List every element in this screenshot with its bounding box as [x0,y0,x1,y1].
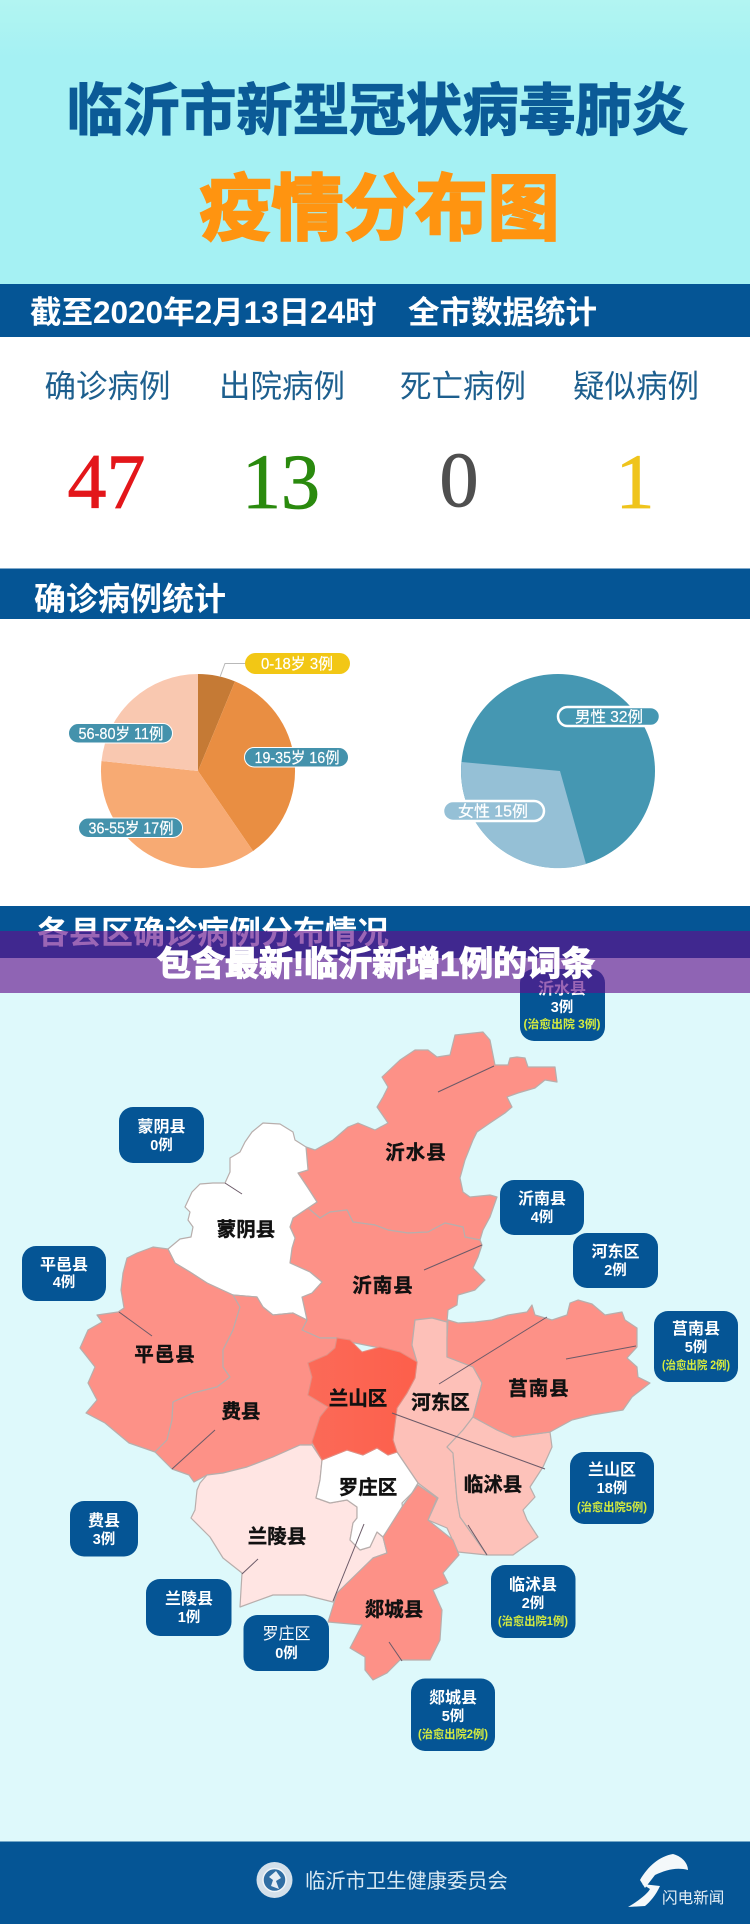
pie chart: age distribution [68,653,350,868]
callout: 蒙阴县: 蒙阴县 [137,1117,186,1136]
stat: discharged [219,368,345,525]
section band: city-wide data: 截至2020年2月13日24时 [30,294,377,330]
map labels: 莒南县 [508,1378,570,1400]
callout: 沂南县: 沂南县 [518,1190,566,1208]
section band: city-wide data: 全市数据统计 [408,294,597,330]
stat: deaths: 0 [440,436,478,523]
callout: 河东区 [573,1233,658,1288]
callout: 莒南县 [654,1311,738,1382]
map labels [134,1142,570,1621]
footer: commission name: 临沂市卫生健康委员会 [305,1870,508,1893]
callout: 兰山区: 18例 [597,1480,627,1497]
map of Linyi [80,1032,650,1680]
label: 56-80: 56-80岁 11例 [78,725,164,743]
map labels: 沂水县 [385,1142,447,1164]
pie chart: gender distribution [443,674,660,868]
map labels: 河东区 [411,1391,470,1414]
footer band [0,1842,750,1924]
section band: confirmed case statistics [0,568,750,619]
callout: 费县 [70,1501,138,1556]
stat: deaths [400,368,526,523]
panel: statistics [44,368,699,525]
region: 平邑县 [80,1247,240,1452]
region: 蒙阴县 [168,1123,322,1320]
callout: 河东区: 河东区 [591,1242,640,1261]
callout: 莒南县: 莒南县 [672,1320,720,1338]
section band: confirmed case statistics: 确诊病例统计 [34,581,226,617]
map labels: 郯城县 [365,1599,423,1621]
stat: suspected: 1 [616,438,654,525]
stat: discharged: 13 [242,438,320,525]
callout: 罗庄区: 罗庄区 [262,1625,311,1643]
region: 罗庄区 [316,1448,418,1550]
map labels: 平邑县 [134,1344,196,1366]
callout: 临沭县 [491,1565,576,1638]
stat: discharged: 出院病例 [219,368,345,404]
callout: 罗庄区: 0例 [275,1645,298,1662]
region: 莒南县 [447,1300,650,1437]
map labels: 罗庄区 [339,1476,397,1499]
stat: deaths: 死亡病例 [400,368,526,404]
callout: 费县: 3例 [93,1531,115,1548]
callout: 蒙阴县 [119,1107,204,1163]
callout: 郯城县 [411,1678,495,1751]
label: male: 男性 32例 [575,708,643,726]
map labels: 蒙阴县 [217,1219,275,1241]
label: male [558,707,660,726]
region: 临沭县 [447,1417,552,1555]
callout: 临沭县: 临沭县 [509,1575,557,1594]
label: 19-35: 19-35岁 16例 [254,749,340,767]
label: 36-55: 36-55岁 17例 [88,820,174,838]
icon: lightning news logo [628,1854,688,1907]
callout: 沂水县: 3例 [551,999,573,1016]
callout: 临沭县: (治愈出院1例) [498,1614,568,1628]
callout: 沂南县 [500,1180,584,1235]
region: 沂南县 [290,1208,485,1365]
region: 兰陵县 [191,1445,387,1607]
map labels: 费县 [221,1401,261,1423]
title line 1: 临沂市新型冠状病毒肺炎 [67,79,688,142]
region: 郯城县 [328,1485,459,1680]
callout: 兰陵县 [146,1579,232,1636]
callout: 沂水县: (治愈出院 3例) [524,1017,601,1031]
callout: 郯城县: (治愈出院2例) [418,1727,488,1741]
icon: health commission emblem [256,1862,292,1898]
callout: 兰陵县: 兰陵县 [165,1590,213,1608]
callout: 沂南县: 4例 [531,1209,553,1226]
callout: 临沭县: 2例 [522,1595,544,1612]
stat: confirmed: 确诊病例 [44,368,171,404]
region: 兰山区 [308,1338,417,1460]
label: female [443,801,544,821]
label: 0-18: 0-18岁 3例 [261,655,333,673]
callout: 罗庄区 [244,1615,329,1671]
stat: confirmed [44,368,171,525]
region: 沂水县 [298,1032,557,1240]
region: 河东区 [393,1318,487,1555]
section band: county distribution: 各县区确诊病例分布情况 [37,914,389,950]
section band: county distribution [0,906,750,958]
stat: confirmed: 47 [68,438,146,525]
callout: 河东区: 2例 [604,1262,627,1279]
title line 2: 疫情分布图 [199,170,560,250]
callout: 平邑县: 4例 [53,1274,75,1291]
label: female: 女性 15例 [458,802,528,820]
map labels: 兰山区 [329,1388,387,1410]
stat: suspected [573,368,699,525]
map labels: 兰陵县 [248,1526,306,1548]
overlay banner: 包含最新!临沂新增1例的词条 [157,946,595,984]
callout: 兰山区: 兰山区 [588,1461,636,1479]
callout: 沂水县 [520,969,605,1041]
callout: 蒙阴县: 0例 [150,1137,173,1154]
callout: 莒南县: 5例 [685,1339,707,1356]
callout: 莒南县: (治愈出院 2例) [662,1358,730,1372]
callout: 郯城县: 5例 [442,1708,464,1725]
region: 费县 [155,1295,337,1482]
callout: 郯城县: 郯城县 [429,1688,477,1707]
callout: 兰山区 [570,1452,654,1524]
callout: 费县: 费县 [88,1512,120,1530]
leader lines [119,1066,636,1661]
map labels: 沂南县 [352,1275,414,1297]
callout: 兰山区: (治愈出院5例) [577,1500,647,1514]
callout: 平邑县: 平邑县 [40,1256,88,1274]
overlay banner [0,931,750,993]
map panel background [0,958,750,1842]
callout: 兰陵县: 1例 [178,1609,200,1626]
label: 0-18 [245,653,350,674]
callout: 平邑县 [22,1246,106,1301]
map labels: 临沭县 [464,1473,522,1496]
footer: lightning news name: 闪电新闻 [662,1889,724,1907]
stat: suspected: 疑似病例 [573,368,699,404]
header panel [0,0,750,284]
callout: 沂水县: 沂水县 [538,980,586,998]
section band: city-wide data [0,284,750,337]
